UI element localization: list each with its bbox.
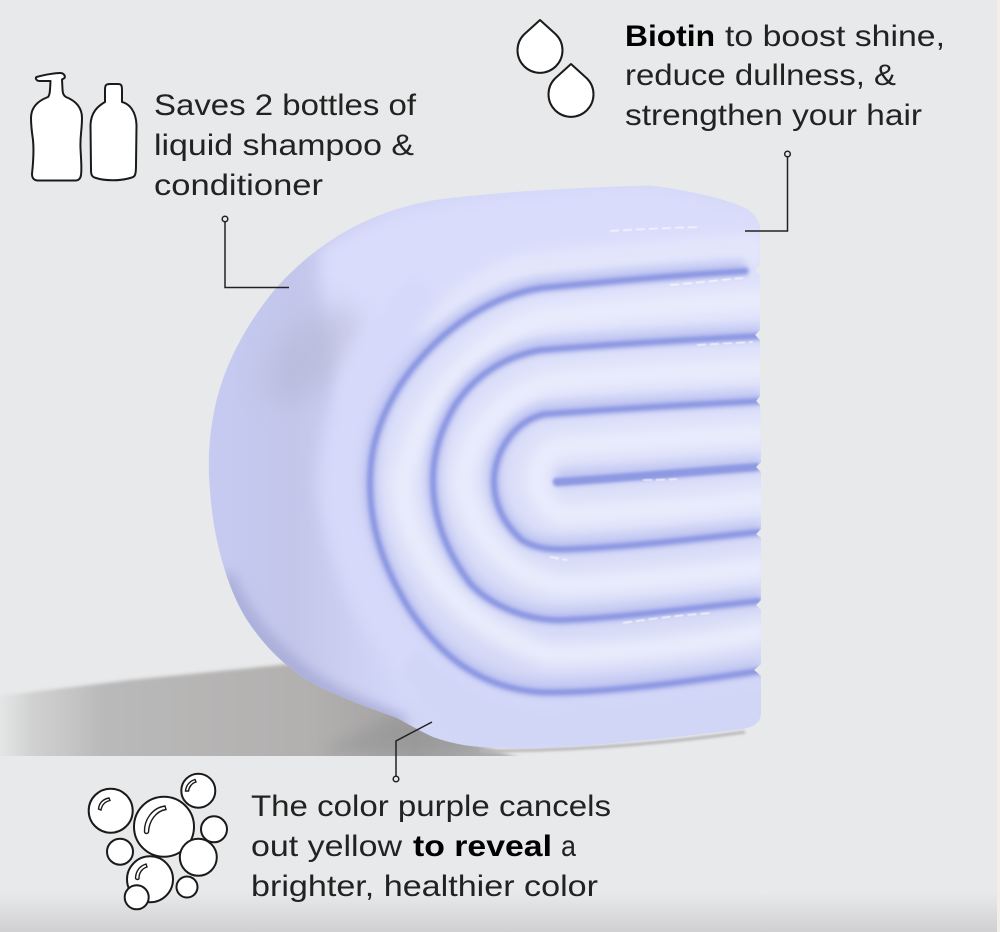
icon: bottles xyxy=(31,73,136,180)
soap body xyxy=(209,186,761,748)
text: biotin: reduce dullness, & xyxy=(625,59,896,92)
leader line: purple xyxy=(393,722,432,782)
leader line: biotin xyxy=(745,151,790,231)
soap shadow xyxy=(7,663,518,756)
icon: pump bottle xyxy=(31,73,82,180)
icon: water drops xyxy=(518,20,594,117)
soap bar xyxy=(209,185,770,752)
soap top band xyxy=(425,238,760,330)
text: biotin: to boost shine, xyxy=(725,20,945,53)
text: saves bottles: liquid shampoo & xyxy=(154,129,414,162)
soap grooves xyxy=(370,271,758,692)
text: saves bottles: Saves 2 bottles of xyxy=(154,89,417,122)
soap ridge highlights xyxy=(402,300,770,655)
text: purple: brighter, healthier color xyxy=(251,870,598,903)
soap groove shade xyxy=(370,267,762,688)
soap outer ridge xyxy=(320,408,366,608)
soap lower edge shade xyxy=(225,575,405,725)
text: saves bottles: conditioner xyxy=(154,169,323,202)
icon: bubbles xyxy=(89,774,227,909)
text: biotin: Biotin xyxy=(625,20,715,53)
soap underside shadow line xyxy=(480,732,745,751)
soap front face xyxy=(380,276,760,522)
soap specular highlights xyxy=(550,227,753,623)
text: purple xyxy=(251,790,611,903)
text: purple: to reveal xyxy=(413,830,552,863)
text: biotin: strengthen your hair xyxy=(625,99,922,132)
soap top light xyxy=(320,228,386,366)
icon: conditioner bottle xyxy=(90,84,136,180)
leader line: saves bottles xyxy=(222,216,289,288)
text: purple: out yellow xyxy=(251,830,402,863)
text: saves bottles xyxy=(154,89,417,202)
text: biotin xyxy=(625,20,945,132)
soap front lower band xyxy=(469,746,481,747)
soap grey patch xyxy=(268,303,360,398)
text: purple: The color purple cancels xyxy=(251,790,611,823)
text: purple: a xyxy=(561,830,576,863)
